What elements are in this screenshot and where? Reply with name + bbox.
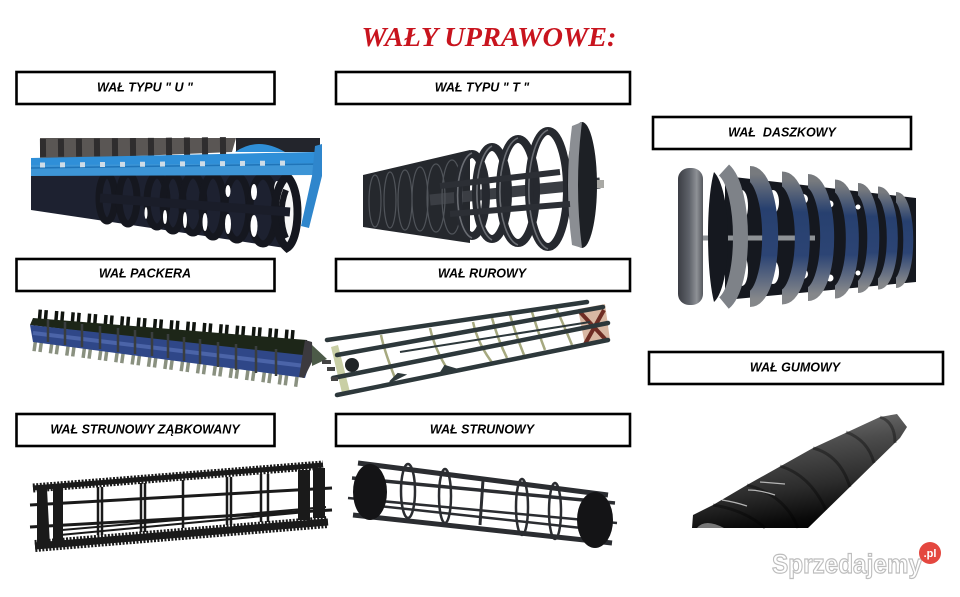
label: wał strunowy ząbkowany	[16, 414, 274, 446]
label: wał strunowy ząbkowany: WAŁ STRUNOWY ZĄBKOWANY	[50, 422, 241, 436]
watermark: Sprzedajemy.pl: .pl	[924, 548, 936, 560]
roller image: wał strunowy ząbkowany	[30, 465, 332, 546]
roller image: wał rurowy	[322, 302, 610, 395]
label: wał gumowy: WAŁ GUMOWY	[750, 360, 842, 374]
title: WAŁY UPRAWOWE:	[362, 22, 616, 52]
roller image: typ U with blue frame	[31, 138, 322, 248]
roller image: wał strunowy	[348, 463, 617, 548]
watermark: Sprzedajemy.pl: Sprzedajemy	[772, 549, 922, 579]
roller image: wał daszkowy	[678, 168, 916, 305]
roller image: typ T	[363, 122, 604, 249]
label: wał strunowy	[336, 414, 630, 446]
label: wał typu U	[16, 72, 274, 104]
label: wał daszkowy: WAŁ DASZKOWY	[728, 126, 837, 140]
label: wał gumowy	[649, 352, 943, 384]
label: wał packera	[16, 259, 274, 291]
label: wał strunowy: WAŁ STRUNOWY	[430, 422, 536, 436]
roller image: wał gumowy	[692, 414, 907, 528]
label: wał rurowy: WAŁ RUROWY	[438, 266, 528, 280]
roller image: wał packera	[30, 316, 327, 382]
label: wał typu T	[336, 72, 630, 104]
label: wał packera: WAŁ PACKERA	[99, 266, 191, 280]
label: wał rurowy	[336, 259, 630, 291]
label: wał daszkowy	[653, 117, 911, 149]
label: wał typu U: WAŁ TYPU " U "	[97, 80, 194, 94]
label: wał typu T: WAŁ TYPU " T "	[435, 80, 530, 94]
